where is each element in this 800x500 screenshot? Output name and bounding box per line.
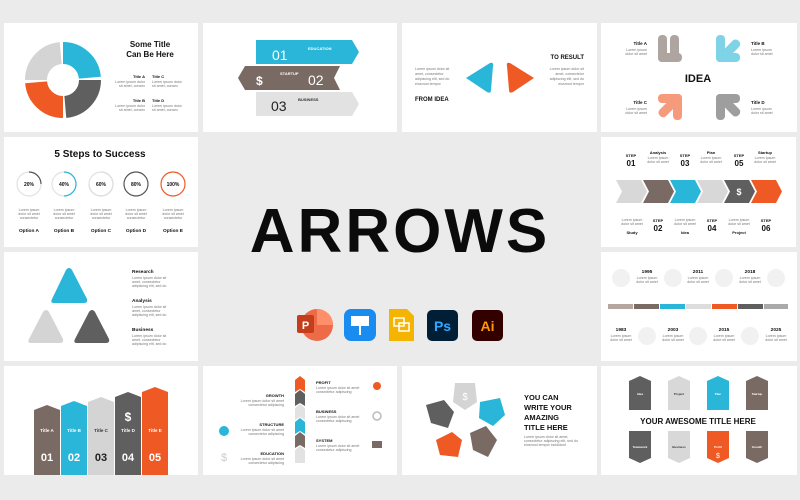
donut chart (36, 53, 90, 107)
panel: steps chevrons: Project (732, 230, 746, 235)
panel: steps chevrons: STEP (680, 153, 691, 158)
panel: from idea to result: FROM IDEA (415, 97, 449, 103)
panel: timeline: 2003 (668, 327, 679, 333)
panel: timeline: dolor sit amet (687, 280, 709, 284)
panel: 5 steps: Lorem ipsum (126, 208, 146, 212)
panel: vertical chevrons: STRUCTURE (259, 422, 284, 427)
panel: steps chevrons: STEP (734, 153, 745, 158)
panel: hex columns (4, 366, 198, 475)
panel: vertical chevrons: $ (221, 452, 227, 464)
panel: steps chevrons: dolor sit amet (700, 160, 722, 164)
panel: cycle donut: Title B (133, 98, 145, 103)
panel: triangles: Lorem ipsum dolor sit (132, 276, 166, 280)
panel: pentagon cycle: WRITE YOUR (524, 403, 572, 412)
panel: vertical chevrons: consectetur adipiscing (248, 403, 284, 407)
panel: vertical chevrons: Lorem ipsum dolor sit amet (316, 444, 359, 448)
panel: vertical chevrons: consectetur adipiscing (248, 461, 284, 465)
panel: ribbons: BUSINESS (298, 97, 319, 102)
panel: idea arrows: dolor sit amet (751, 111, 773, 115)
panel: steps chevrons: dolor sit amet (674, 222, 696, 226)
panel: cycle donut: sit amet, consec (152, 108, 178, 112)
panel: triangles: amet, consectetur (132, 280, 161, 284)
panel: cycle donut: Lorem ipsum dolor (152, 80, 183, 84)
panel: hex columns: $ (125, 410, 132, 424)
panel: 5 steps: Option D (126, 228, 147, 234)
panel: from idea to result: Lorem ipsum dolor sit (415, 67, 449, 71)
panel: timeline: dolor sit amet (610, 338, 632, 342)
panel: cycle donut: Lorem ipsum dolor (115, 104, 146, 108)
panel: idea arrows (601, 23, 797, 132)
title: Some Title (130, 40, 171, 49)
panel: steps chevrons: Lorem ipsum (648, 156, 668, 160)
panel: steps chevrons: dolor sit amet (754, 160, 776, 164)
panel: 5 steps: 60% (96, 182, 107, 188)
panel: tags: Growth (752, 445, 762, 449)
panel: steps chevrons: $ (736, 187, 742, 197)
panel: ribbons: 01 (272, 47, 288, 63)
panel: 5 steps: Option A (19, 228, 40, 234)
panel: cycle donut: Can Be Here (126, 50, 174, 59)
panel: steps chevrons: 05 (735, 159, 744, 168)
panel: 5 steps: dolor sit amet (125, 212, 147, 216)
panel: ribbons: $ (256, 74, 263, 88)
panel: hex columns: Title A (40, 428, 54, 433)
panel: pentagon cycle: YOU CAN (524, 393, 559, 402)
panel: pentagon cycle: $ (462, 392, 468, 403)
panel: from idea to result: Lorem ipsum dolor sit (550, 67, 584, 71)
panel: vertical chevrons: EDUCATION (261, 451, 284, 456)
panel: hex columns: Title C (94, 428, 109, 433)
panel: timeline: Lorem ipsum (611, 334, 631, 338)
panel: steps chevrons: STEP (761, 218, 772, 223)
panel: cycle donut (4, 23, 198, 132)
panel: cycle donut: Title A (133, 74, 145, 79)
panel: idea arrows: Lorem ipsum (626, 48, 647, 52)
panel: idea arrows: dolor sit amet (625, 111, 647, 115)
panel: from idea to result (402, 23, 597, 132)
panel: idea arrows: Title C (633, 100, 648, 105)
panel: vertical chevrons: consectetur adipiscing (316, 390, 352, 394)
panel: timeline: 2015 (719, 327, 730, 333)
panel: vertical chevrons: Lorem ipsum dolor sit amet (241, 457, 284, 461)
panel: steps chevrons: dolor sit amet (728, 222, 750, 226)
panel: timeline: 1983 (616, 327, 627, 333)
panel: steps chevrons: Lorem ipsum (701, 156, 721, 160)
panel: steps chevrons: Analysis (650, 150, 667, 155)
panel: cycle donut: Title D (152, 98, 164, 103)
panel: timeline: dolor sit amet (662, 338, 684, 342)
panel: timeline: 2025 (771, 327, 782, 333)
panel: triangles: adipiscing elit, sed do (132, 284, 166, 288)
panel: steps chevrons: dolor sit amet (621, 222, 643, 226)
panel: tags: $ (716, 453, 720, 460)
panel: idea arrows: Title A (633, 41, 648, 46)
panel: pentagon cycle: TITLE HERE (524, 423, 568, 432)
panel: timeline: Lorem ipsum (714, 334, 734, 338)
panel: idea arrows: dolor sit amet (751, 52, 773, 56)
panel: triangles: amet, consectetur (132, 338, 161, 342)
panel: steps chevrons: 02 (654, 224, 663, 233)
panel: 5 steps: consectetur (92, 216, 111, 220)
panel: tags: Business (672, 445, 686, 449)
panel: ribbons (203, 23, 397, 132)
panel: 5 steps: Lorem ipsum (91, 208, 111, 212)
panel: triangles: Research (132, 269, 154, 275)
panel: timeline: Lorem ipsum (766, 334, 786, 338)
panel: 5 steps: dolor sit amet (162, 212, 184, 216)
panel: steps chevrons (601, 137, 796, 247)
panel: tags (601, 366, 797, 475)
panel: hex columns: 01 (41, 452, 53, 464)
panel: steps chevrons: 06 (762, 224, 771, 233)
panel: steps chevrons: STEP (707, 218, 718, 223)
panel: vertical chevrons: BUSINESS (316, 409, 337, 414)
panel: hex columns: 02 (68, 452, 80, 464)
panel: 5 steps: 100% (167, 182, 180, 188)
panel: hex columns: Title B (67, 428, 82, 433)
panel: tags: Idea (637, 392, 643, 396)
panel: 5 steps: Option E (163, 228, 184, 234)
panel: vertical chevrons: GROWTH (266, 393, 284, 398)
panel: timeline: dolor sit amet (765, 338, 787, 342)
panel: vertical chevrons: consectetur adipiscing (248, 432, 284, 436)
panel: from idea to result: eiusmod tempor (558, 82, 585, 86)
panel: timeline: dolor sit amet (739, 280, 761, 284)
icons: app logos (297, 309, 503, 341)
panel: 5 steps: Lorem ipsum (54, 208, 74, 212)
panel: from idea to result: amet, consectetur (415, 72, 444, 76)
icons: app logos: Ai (480, 318, 494, 334)
panel: 5 steps: Lorem ipsum (163, 208, 183, 212)
panel: vertical chevrons: Lorem ipsum dolor sit amet (241, 399, 284, 403)
panel: triangles: amet, consectetur (132, 309, 161, 313)
panel: steps chevrons: Lorem ipsum (729, 218, 749, 222)
panel: 5 steps: 80% (131, 182, 142, 188)
panel: pentagon cycle: consectetur adipiscing elit, sed do (524, 439, 578, 443)
panel: pentagon cycle: AMAZING (524, 413, 559, 422)
panel: vertical chevrons: Lorem ipsum dolor sit amet (316, 415, 359, 419)
panel: 5 steps: 20% (24, 182, 35, 188)
panel: timeline: dolor sit amet (636, 280, 658, 284)
panel: 5 steps (4, 137, 198, 247)
panel: triangles: Lorem ipsum dolor sit (132, 305, 166, 309)
panel: pentagon cycle: eiusmod tempor incididunt (524, 443, 566, 447)
panel: steps chevrons: STEP (653, 218, 664, 223)
panel: timeline: Lorem ipsum (688, 276, 708, 280)
panel: 5 steps: dolor sit amet (53, 212, 75, 216)
panel: steps chevrons: Lorem ipsum (755, 156, 775, 160)
panel: steps chevrons: Startup (758, 150, 773, 155)
icons: app logos: P (302, 320, 309, 332)
panel: 5 steps: consectetur (164, 216, 183, 220)
panel: triangles: adipiscing elit, sed do (132, 342, 166, 346)
panel: 5 steps: 40% (59, 182, 70, 188)
panel: tags: Project (674, 392, 684, 396)
panel: vertical chevrons (203, 366, 397, 475)
panel: vertical chevrons: PROFIT (316, 380, 331, 385)
panel: idea arrows: Lorem ipsum (626, 107, 647, 111)
title: ARROWS: ARROWS (250, 197, 550, 266)
panel: steps chevrons: 01 (627, 159, 636, 168)
panel: hex columns: 05 (149, 452, 161, 464)
panel: pentagon cycle (402, 366, 597, 475)
panel: steps chevrons: Lorem ipsum (622, 218, 642, 222)
panel: idea arrows: Title D (751, 100, 765, 105)
panel: steps chevrons: Plan (707, 150, 716, 155)
panel: hex columns: 03 (95, 452, 107, 464)
panel: cycle donut: sit amet, consec (152, 84, 178, 88)
panel: timeline: Lorem ipsum (663, 334, 683, 338)
panel: timeline: 2011 (693, 269, 704, 275)
panel: idea arrows: Lorem ipsum (751, 48, 772, 52)
panel: ribbons: STARTUP (280, 71, 299, 76)
panel: steps chevrons: Lorem ipsum (675, 218, 695, 222)
panel: 5 steps: dolor sit amet (18, 212, 40, 216)
panel: steps chevrons: Study (626, 230, 638, 235)
panel: timeline: 1995 (642, 269, 653, 275)
panel: vertical chevrons: consectetur adipiscing (316, 448, 352, 452)
panel: pentagon cycle: Lorem ipsum dolor sit amet, (524, 435, 568, 439)
panel: timeline: Lorem ipsum (740, 276, 760, 280)
panel: timeline: dolor sit amet (713, 338, 735, 342)
panel: hex columns: Title E (148, 428, 162, 433)
panel: hex columns: Title D (121, 428, 136, 433)
panel: steps chevrons: dolor sit amet (647, 160, 669, 164)
panel: from idea to result: adipiscing elit, sed do (415, 77, 449, 81)
panel: steps chevrons: STEP (626, 153, 637, 158)
panel: 5 steps: Option B (54, 228, 75, 234)
panel: ribbons: 02 (308, 72, 324, 88)
panel: tags: Profit (714, 445, 722, 449)
panel: triangles: Lorem ipsum dolor sit (132, 334, 166, 338)
panel: vertical chevrons: SYSTEM (316, 438, 333, 443)
panel: steps chevrons: Idea (681, 230, 690, 235)
panel: tags: Teamwork (633, 445, 648, 449)
panel: vertical chevrons: Lorem ipsum dolor sit amet (241, 428, 284, 432)
panel: triangles (4, 252, 198, 361)
panel: idea arrows: Title B (751, 41, 765, 46)
panel: triangles: Analysis (132, 298, 152, 304)
panel: from idea to result: adipiscing elit, sed do (550, 77, 584, 81)
panel: from idea to result: amet, consectetur (555, 72, 585, 76)
panel: from idea to result: eiusmod tempor (415, 82, 442, 86)
panel: timeline: 2018 (745, 269, 756, 275)
panel: idea arrows: Lorem ipsum (751, 107, 772, 111)
panel: cycle donut: Lorem ipsum dolor (152, 104, 183, 108)
panel: 5 steps: dolor sit amet (90, 212, 112, 216)
icons: app logos: Ps (434, 318, 451, 334)
panel: tags: YOUR AWESOME TITLE HERE (640, 417, 757, 426)
panel: 5 steps: consectetur (20, 216, 39, 220)
panel: vertical chevrons: Lorem ipsum dolor sit amet (316, 386, 359, 390)
panel: timeline (601, 252, 797, 361)
panel: cycle donut: Lorem ipsum dolor (115, 80, 146, 84)
panel: 5 steps: Option C (91, 228, 112, 234)
panel: cycle donut: Title C (152, 74, 164, 79)
panel: cycle donut: sit amet, consec (119, 108, 145, 112)
panel: steps chevrons: 04 (708, 224, 717, 233)
panel: vertical chevrons: consectetur adipiscing (316, 419, 352, 423)
panel: 5 steps: 5 Steps to Success (54, 149, 146, 160)
panel: idea arrows: dolor sit amet (625, 52, 647, 56)
panel: tags: Plan (715, 392, 721, 396)
panel: 5 steps: consectetur (55, 216, 74, 220)
panel: idea arrows: IDEA (685, 73, 711, 85)
panel: timeline: Lorem ipsum (637, 276, 657, 280)
panel: hex columns: 04 (122, 452, 135, 464)
panel: triangles: Business (132, 327, 154, 333)
panel: 5 steps: Lorem ipsum (19, 208, 39, 212)
panel: 5 steps: consectetur (127, 216, 146, 220)
panel: from idea to result: TO RESULT (551, 55, 584, 61)
panel: ribbons: 03 (271, 98, 287, 114)
panel: ribbons: EDUCATION (308, 46, 332, 51)
panel: triangles: adipiscing elit, sed do (132, 313, 166, 317)
panel: cycle donut: sit amet, consec (119, 84, 145, 88)
panel: steps chevrons: 03 (681, 159, 690, 168)
panel: tags: Startup (752, 392, 762, 396)
